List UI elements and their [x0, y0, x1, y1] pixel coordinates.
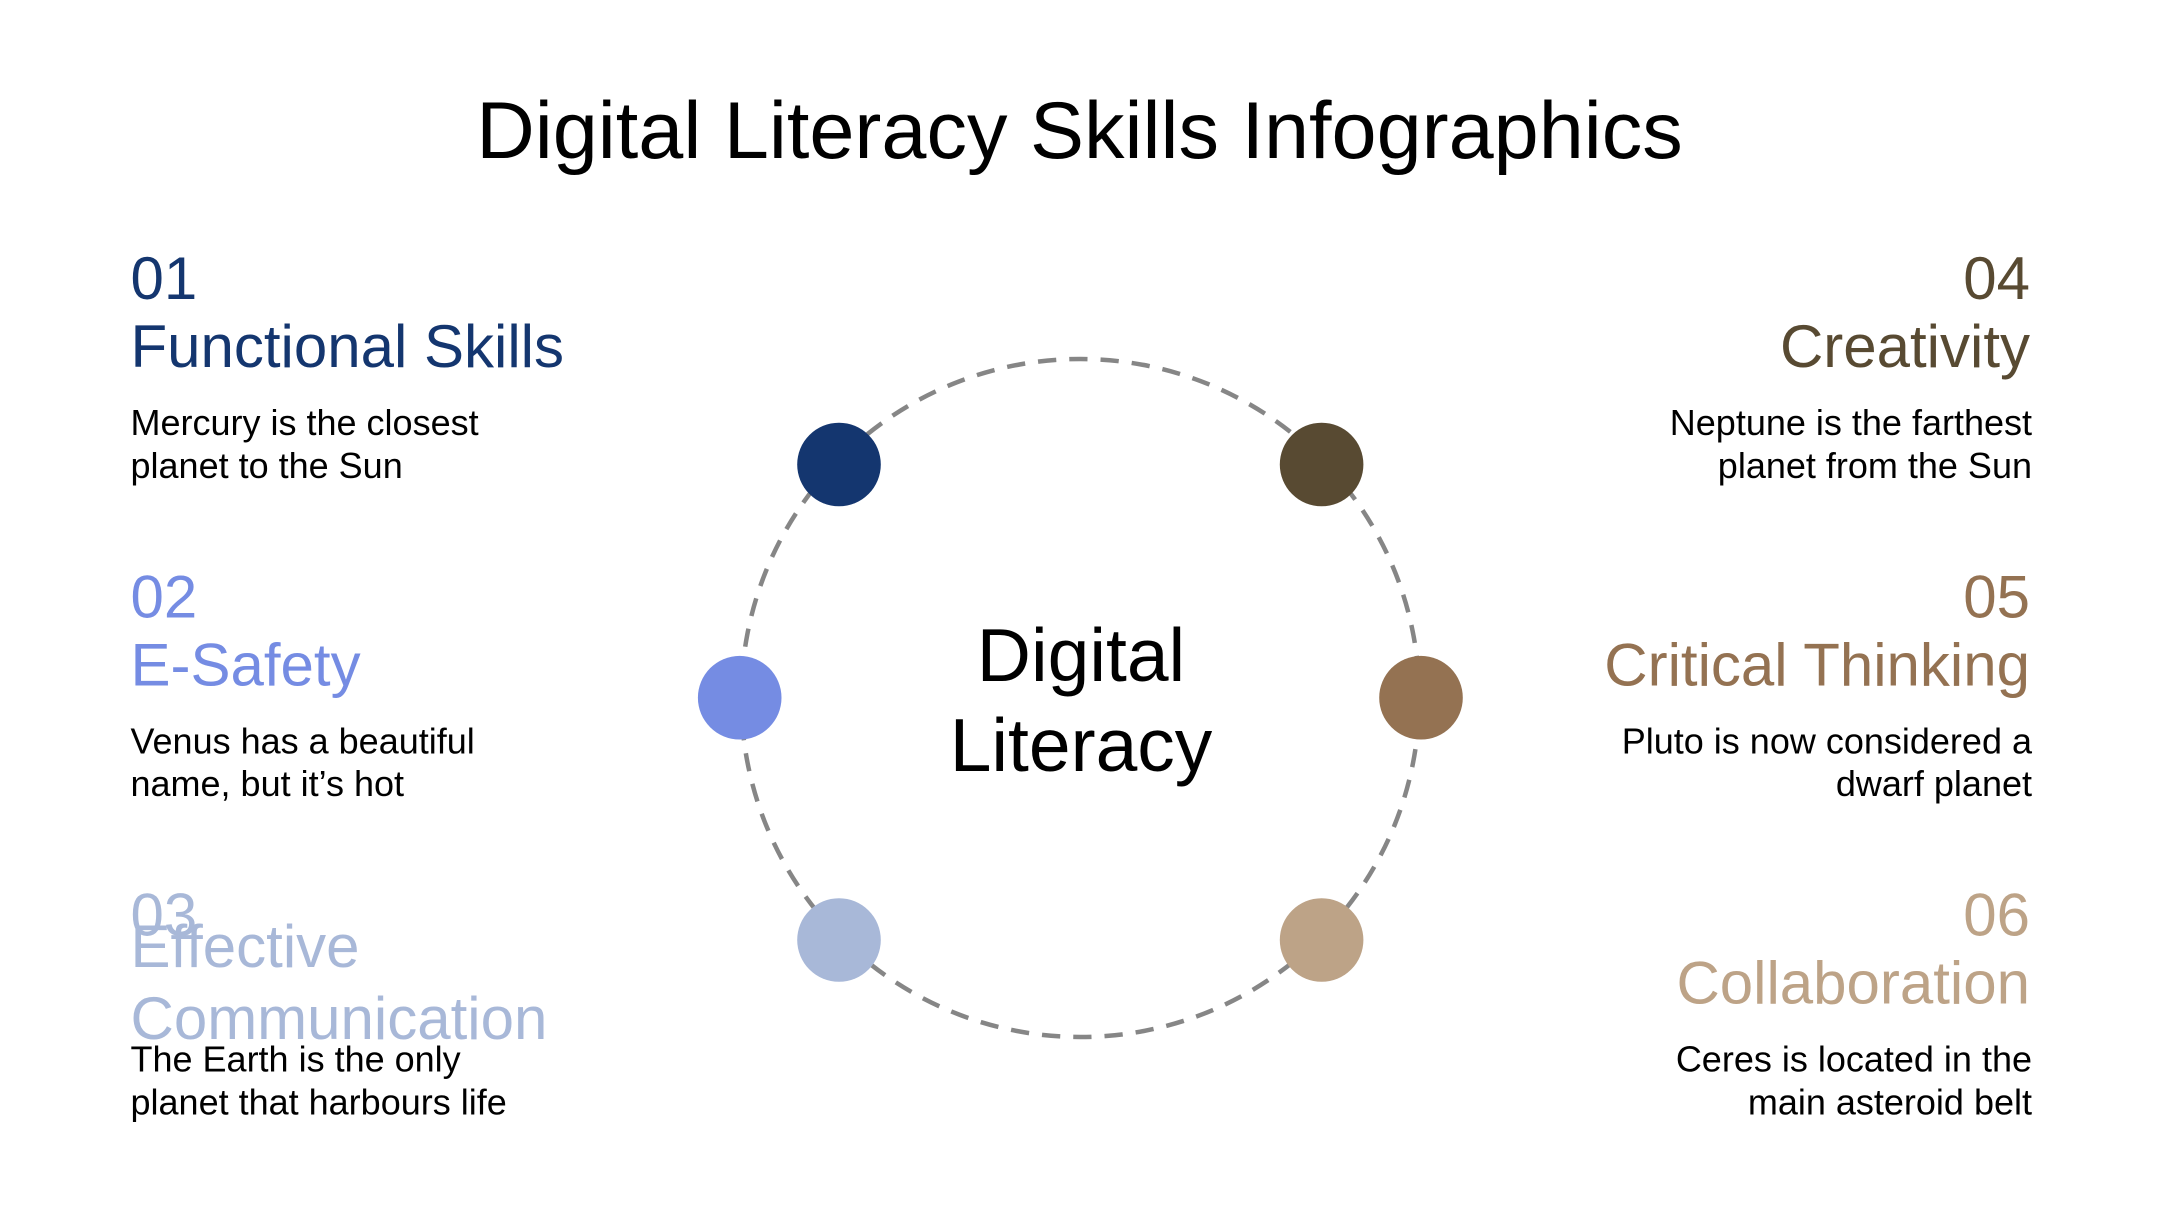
- item 02: 02: [130, 563, 197, 630]
- item 03: Communication: [130, 985, 547, 1052]
- item 02: Venus has a beautiful: [130, 720, 475, 761]
- node 02: [698, 656, 782, 740]
- node 06: [1280, 898, 1363, 982]
- node 04: [1280, 423, 1363, 506]
- item 03: [130, 882, 547, 1122]
- item 06: main asteroid belt: [1748, 1081, 2032, 1122]
- item 01: Functional Skills: [130, 313, 564, 380]
- title: Digital Literacy Skills Infographics: [476, 86, 1683, 176]
- item 06: [1676, 882, 2032, 1122]
- item 03: The Earth is the only: [130, 1039, 461, 1080]
- item 01: [130, 245, 564, 486]
- center label: Digital: [977, 613, 1185, 697]
- node 01: [797, 423, 881, 506]
- item 04: Neptune is the farthest: [1670, 402, 2032, 443]
- item 04: Creativity: [1780, 313, 2030, 380]
- item 04: planet from the Sun: [1718, 445, 2032, 486]
- item 05: Critical Thinking: [1604, 631, 2030, 698]
- item 03: 03: [130, 882, 197, 949]
- item 04: [1670, 245, 2032, 486]
- item 06: Collaboration: [1676, 950, 2030, 1017]
- item 03: planet that harbours life: [130, 1081, 507, 1122]
- center label: Literacy: [950, 703, 1213, 787]
- item 05: dwarf planet: [1836, 763, 2032, 804]
- item 05: 05: [1963, 563, 2030, 630]
- item 01: 01: [130, 245, 197, 312]
- item 05: Pluto is now considered a: [1622, 720, 2033, 761]
- item 02: E-Safety: [130, 631, 361, 698]
- item 01: Mercury is the closest: [130, 402, 479, 443]
- item 04: 04: [1963, 245, 2030, 312]
- item 02: name, but it’s hot: [130, 763, 404, 804]
- item 03: Effective: [130, 913, 360, 980]
- item 06: 06: [1963, 882, 2030, 949]
- item 06: Ceres is located in the: [1676, 1039, 2032, 1080]
- item 02: [130, 563, 475, 804]
- node 05: [1379, 656, 1463, 740]
- item 05: [1604, 563, 2033, 804]
- item 01: planet to the Sun: [130, 445, 403, 486]
- dashed ring: [741, 359, 1419, 1037]
- node 03: [797, 898, 881, 982]
- diagram: dashed ring with nodes: [698, 359, 1463, 1037]
